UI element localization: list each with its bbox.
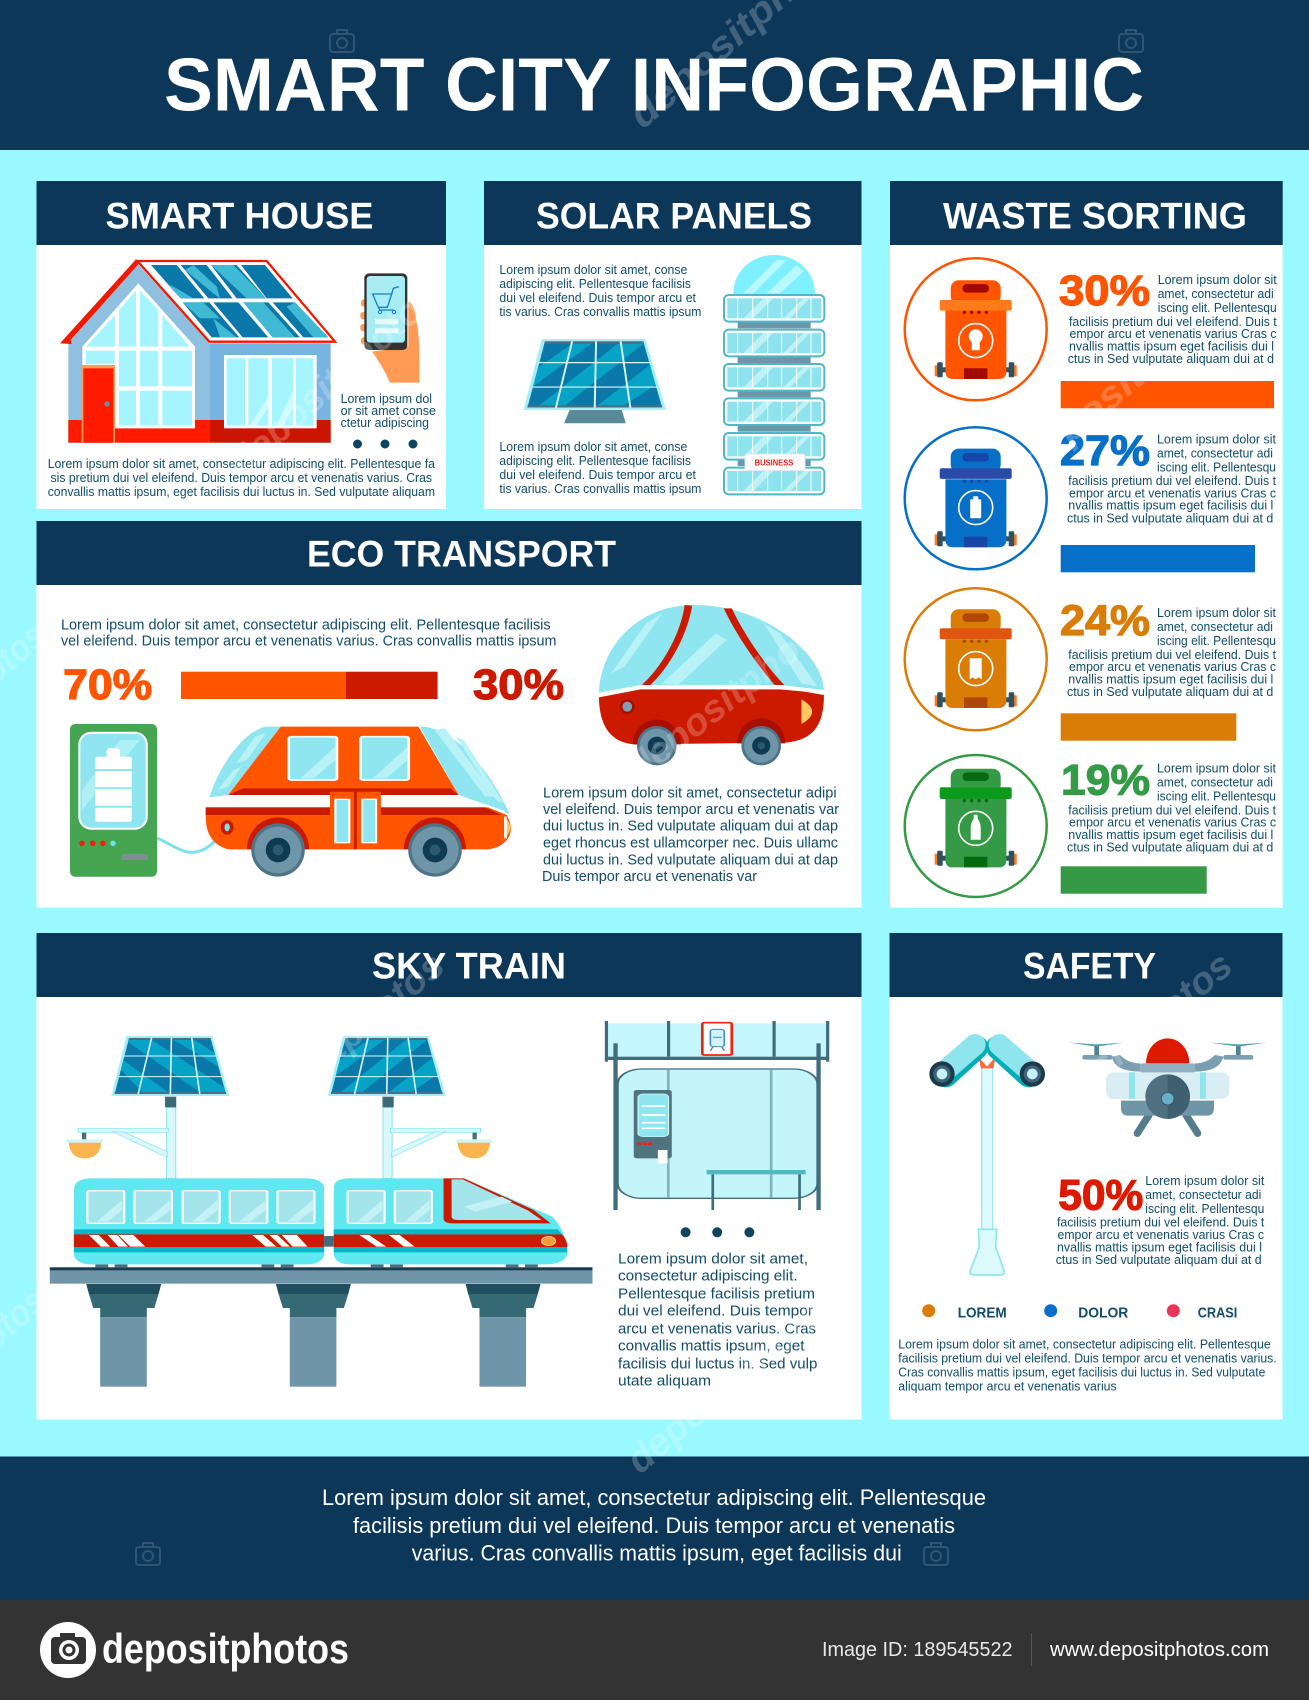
text: safety body: Lorem ipsum dolor sit amet, consectetur adipiscing elit. Pellentesque xyxy=(898,1336,1271,1351)
legend: CRASI xyxy=(1198,1304,1237,1321)
watermarks: depositphotos xyxy=(1011,944,1241,1147)
text: sky train body: dui vel eleifend. Duis tempor xyxy=(618,1303,813,1320)
illustration: solar office tower xyxy=(724,255,824,494)
text: orange description: iscing elit. Pellentesqu xyxy=(1158,300,1277,315)
text: orange description: ctus in Sed vulputate aliquam dui at d xyxy=(1068,351,1274,366)
text: safety body: Cras convallis mattis ipsum, eget facilisis dui luctus in. Sed vulputate xyxy=(898,1364,1265,1379)
bar: 70/30 split xyxy=(181,672,438,699)
text: green description: empor arcu et venenatis varius Cras c xyxy=(1069,814,1276,829)
train car xyxy=(74,1178,324,1264)
text: safety stat description: nvallis mattis ipsum eget facilisis dui l xyxy=(1057,1240,1262,1255)
text: safety stat description: amet, consectetur adi xyxy=(1145,1187,1261,1202)
text: green description: facilisis pretium dui vel eleifend. Duis t xyxy=(1068,802,1276,817)
icon: orange bin with bulb xyxy=(905,258,1047,400)
brand wordmark: depositphotos xyxy=(102,1625,349,1672)
value: 24%: 24% xyxy=(1060,597,1150,645)
value: 70%: 70% xyxy=(63,661,152,709)
bar: 24% xyxy=(1061,713,1236,741)
text: safety stat description: Lorem ipsum dolor sit xyxy=(1145,1173,1265,1188)
panel: eco transport xyxy=(36,521,862,908)
icon: amber bin with paper xyxy=(905,588,1047,730)
text: green description: nvallis mattis ipsum eget facilisis dui l xyxy=(1068,827,1273,842)
text: smart house body: convallis mattis ipsum, eget facilisis dui luctus in. Sed vulputate aliquam xyxy=(48,484,435,499)
panel: safety xyxy=(890,933,1282,1420)
text: amber description: facilisis pretium dui vel eleifend. Duis t xyxy=(1068,647,1276,662)
text: eco intro: Lorem ipsum dolor sit amet, consectetur adipiscing elit. Pellentesque facilisis xyxy=(61,616,551,633)
heading: smart house: SMART HOUSE xyxy=(106,196,374,236)
illustration: house with solar roof xyxy=(60,259,335,443)
pagination dots xyxy=(353,440,418,448)
text: footer xyxy=(322,1485,986,1566)
illustration: solar street lamps xyxy=(66,1036,492,1178)
text: safety body xyxy=(898,1336,1277,1393)
heading: safety: SAFETY xyxy=(1023,946,1156,986)
text: eco body: Duis tempor arcu et venenatis var xyxy=(542,868,757,885)
illustration: orange electric van xyxy=(206,727,511,877)
text: sky train body: arcu et venenatis varius. Cras xyxy=(618,1320,816,1337)
text: safety body: aliquam tempor arcu et venenatis varius xyxy=(898,1378,1117,1393)
panel: smart house xyxy=(36,181,446,509)
legend: DOLOR xyxy=(1078,1304,1128,1321)
text: blue description: facilisis pretium dui vel eleifend. Duis t xyxy=(1068,473,1276,488)
text: smart house body xyxy=(48,456,436,499)
text: eco intro xyxy=(61,616,556,650)
icon: hand with smartphone xyxy=(360,273,419,383)
text: sky train body: consectetur adipiscing elit. xyxy=(618,1268,798,1285)
text: green description: amet, consectetur adi xyxy=(1157,774,1273,789)
text: solar lower: dui vel eleifend. Duis tempor arcu et xyxy=(499,467,696,482)
text: solar lower: adipiscing elit. Pellentesque facilisis xyxy=(499,453,691,468)
text: orange description xyxy=(1068,272,1277,366)
text: safety stat description: facilisis pretium dui vel eleifend. Duis t xyxy=(1057,1215,1265,1230)
text: green description: iscing elit. Pellentesqu xyxy=(1157,788,1276,803)
text: sky train body: facilisis dui luctus in. Sed vulp xyxy=(618,1355,817,1372)
title: SMART CITY INFOGRAPHIC xyxy=(164,42,1144,126)
text: footer: Lorem ipsum dolor sit amet, consectetur adipiscing elit. Pellentesque xyxy=(322,1485,986,1510)
text: blue description: ctus in Sed vulputate aliquam dui at d xyxy=(1067,510,1273,525)
value: 27%: 27% xyxy=(1060,427,1150,475)
viaduct xyxy=(50,1267,592,1387)
text: sky train body: Lorem ipsum dolor sit amet, xyxy=(618,1250,808,1267)
illustration: red electric car xyxy=(599,605,824,765)
text: green description: Lorem ipsum dolor sit xyxy=(1157,760,1276,775)
text: blue description: iscing elit. Pellentesqu xyxy=(1157,459,1276,474)
text: amber description xyxy=(1067,605,1276,699)
bar: 30% xyxy=(1061,381,1274,408)
legend: LOREM xyxy=(958,1304,1007,1321)
text: amber description: amet, consectetur adi xyxy=(1157,619,1273,634)
text: safety stat description: empor arcu et venenatis varius Cras c xyxy=(1058,1227,1264,1242)
icon: ticket kiosk xyxy=(634,1090,672,1163)
title band xyxy=(0,0,1309,150)
text: safety body: facilisis pretium dui vel eleifend. Duis tempor arcu et venenatis varius. xyxy=(898,1350,1277,1365)
text: smart house body: sis pretium dui vel eleifend. Duis tempor arcu et venenatis varius. Cras xyxy=(50,470,432,485)
text: orange description: facilisis pretium dui vel eleifend. Duis t xyxy=(1069,314,1277,329)
watermarks: depositphotos xyxy=(619,1279,849,1482)
text: green description xyxy=(1067,760,1276,854)
text: blue description xyxy=(1067,431,1276,525)
legend xyxy=(922,1304,1237,1321)
waste item: 30% orange bin xyxy=(905,258,1277,408)
text: amber description: ctus in Sed vulputate aliquam dui at d xyxy=(1067,684,1273,699)
text: blue description: empor arcu et venenatis varius Cras c xyxy=(1069,485,1276,500)
website: www.depositphotos.com xyxy=(1049,1639,1269,1661)
text: orange description: amet, consectetur adi xyxy=(1158,286,1274,301)
footer band xyxy=(0,1456,1309,1600)
text: blue description: nvallis mattis ipsum eget facilisis dui l xyxy=(1068,498,1273,513)
text: safety stat description: ctus in Sed vulputate aliquam dui at d xyxy=(1056,1252,1262,1267)
bench xyxy=(707,1170,806,1210)
text: orange description: nvallis mattis ipsum eget facilisis dui l xyxy=(1069,338,1274,353)
text: solar upper: Lorem ipsum dolor sit amet, conse xyxy=(499,262,687,277)
text: smart house body: Lorem ipsum dolor sit amet, consectetur adipiscing elit. Pellentesque fa xyxy=(48,456,436,471)
train locomotive xyxy=(334,1178,567,1264)
text: green description: ctus in Sed vulputate aliquam dui at d xyxy=(1067,839,1273,854)
text: phone caption: ctetur adipiscing xyxy=(341,415,429,430)
icon: blue bin with battery xyxy=(905,427,1047,569)
text: solar upper: adipiscing elit. Pellentesque facilisis xyxy=(499,276,691,291)
text: solar lower: tis varius. Cras convallis mattis ipsum xyxy=(499,481,701,496)
illustration: solar office tower: BUSINESS xyxy=(755,459,794,468)
panel: solar panels xyxy=(484,181,862,509)
text: orange description: Lorem ipsum dolor sit xyxy=(1158,272,1277,287)
heading: eco transport: ECO TRANSPORT xyxy=(307,534,616,574)
text: amber description: empor arcu et venenatis varius Cras c xyxy=(1069,659,1276,674)
icon: charging station xyxy=(70,724,227,877)
heading: waste sorting: WASTE SORTING xyxy=(943,196,1247,236)
watermarks: deposit xyxy=(1011,354,1154,484)
text: phone caption: Lorem ipsum dol xyxy=(341,391,432,406)
waste item: 27% blue bin xyxy=(905,427,1276,572)
value: 19%: 19% xyxy=(1061,756,1150,804)
icon: tram sign xyxy=(702,1023,732,1055)
text: blue description: Lorem ipsum dolor sit xyxy=(1157,431,1276,446)
watermarks: depositphotos xyxy=(223,944,453,1147)
waste item: 24% amber bin xyxy=(905,588,1276,741)
text: amber description: iscing elit. Pellentesqu xyxy=(1157,633,1276,648)
watermarks: depositphotos xyxy=(222,275,447,484)
text: amber description: nvallis mattis ipsum eget facilisis dui l xyxy=(1068,672,1273,687)
text: footer: varius. Cras convallis mattis ipsum, eget facilisis dui xyxy=(412,1541,902,1566)
text: sky train body: Pellentesque facilisis pretium xyxy=(618,1285,815,1302)
panel: sky train xyxy=(36,933,862,1420)
text: eco body: dui luctus in. Sed vulputate aliquam dui at dap xyxy=(543,851,838,868)
text: eco body: vel eleifend. Duis tempor arcu et venenatis var xyxy=(543,801,839,818)
text: sky train body xyxy=(618,1250,817,1390)
illustration: camera pole xyxy=(929,1045,1045,1275)
image id: Image ID: 189545522 xyxy=(822,1639,1012,1661)
text: sky train body: utate aliquam xyxy=(618,1373,711,1390)
bar: 27% xyxy=(1061,545,1255,572)
text: eco body: Lorem ipsum dolor sit amet, consectetur adipi xyxy=(543,784,837,801)
text: eco intro: vel eleifend. Duis tempor arcu et venenatis varius. Cras convallis mattis ipsum xyxy=(61,633,556,650)
text: orange description: empor arcu et venenatis varius Cras c xyxy=(1070,326,1277,341)
illustration: solar panel xyxy=(517,339,666,423)
text: phone caption xyxy=(341,391,436,430)
text: footer: facilisis pretium dui vel eleifend. Duis tempor arcu et venenatis xyxy=(353,1513,955,1538)
text: blue description: amet, consectetur adi xyxy=(1157,445,1273,460)
text: safety stat description xyxy=(1056,1173,1265,1267)
value: 30%: 30% xyxy=(473,661,564,709)
text: amber description: Lorem ipsum dolor sit xyxy=(1157,605,1276,620)
text: sky train body: convallis mattis ipsum, eget xyxy=(618,1338,805,1355)
text: solar upper: dui vel eleifend. Duis tempor arcu et xyxy=(499,290,696,305)
panel: waste sorting xyxy=(890,181,1283,908)
text: solar upper: tis varius. Cras convallis mattis ipsum xyxy=(499,304,701,319)
text: eco body xyxy=(542,784,839,885)
bar: 19% xyxy=(1061,866,1207,894)
heading: sky train: SKY TRAIN xyxy=(372,946,566,986)
text: solar lower: Lorem ipsum dolor sit amet, conse xyxy=(499,439,687,454)
attribution bar xyxy=(0,1600,1309,1700)
pagination dots xyxy=(681,1227,754,1237)
icon: green bin with bottle xyxy=(905,755,1047,897)
text: solar upper xyxy=(499,262,701,319)
icon: depositphotos camera logo xyxy=(40,1622,96,1678)
text: solar lower xyxy=(499,439,701,496)
value: 30%: 30% xyxy=(1059,267,1150,315)
illustration: train on viaduct xyxy=(50,1178,592,1387)
illustration: security drone xyxy=(1069,1038,1266,1133)
text: phone caption: or sit amet conse xyxy=(341,403,436,418)
waste item: 19% green bin xyxy=(905,755,1276,897)
text: eco body: eget rhoncus est ullamcorper nec. Duis ullamc xyxy=(543,834,838,851)
watermarks: depositphotos xyxy=(620,593,854,789)
illustration: bus stop shelter xyxy=(605,1021,829,1210)
value: 50%: 50% xyxy=(1058,1171,1143,1219)
heading: solar panels: SOLAR PANELS xyxy=(536,196,812,236)
text: eco body: dui luctus in. Sed vulputate aliquam dui at dap xyxy=(543,818,838,835)
text: safety stat description: iscing elit. Pellentesqu xyxy=(1145,1201,1264,1216)
